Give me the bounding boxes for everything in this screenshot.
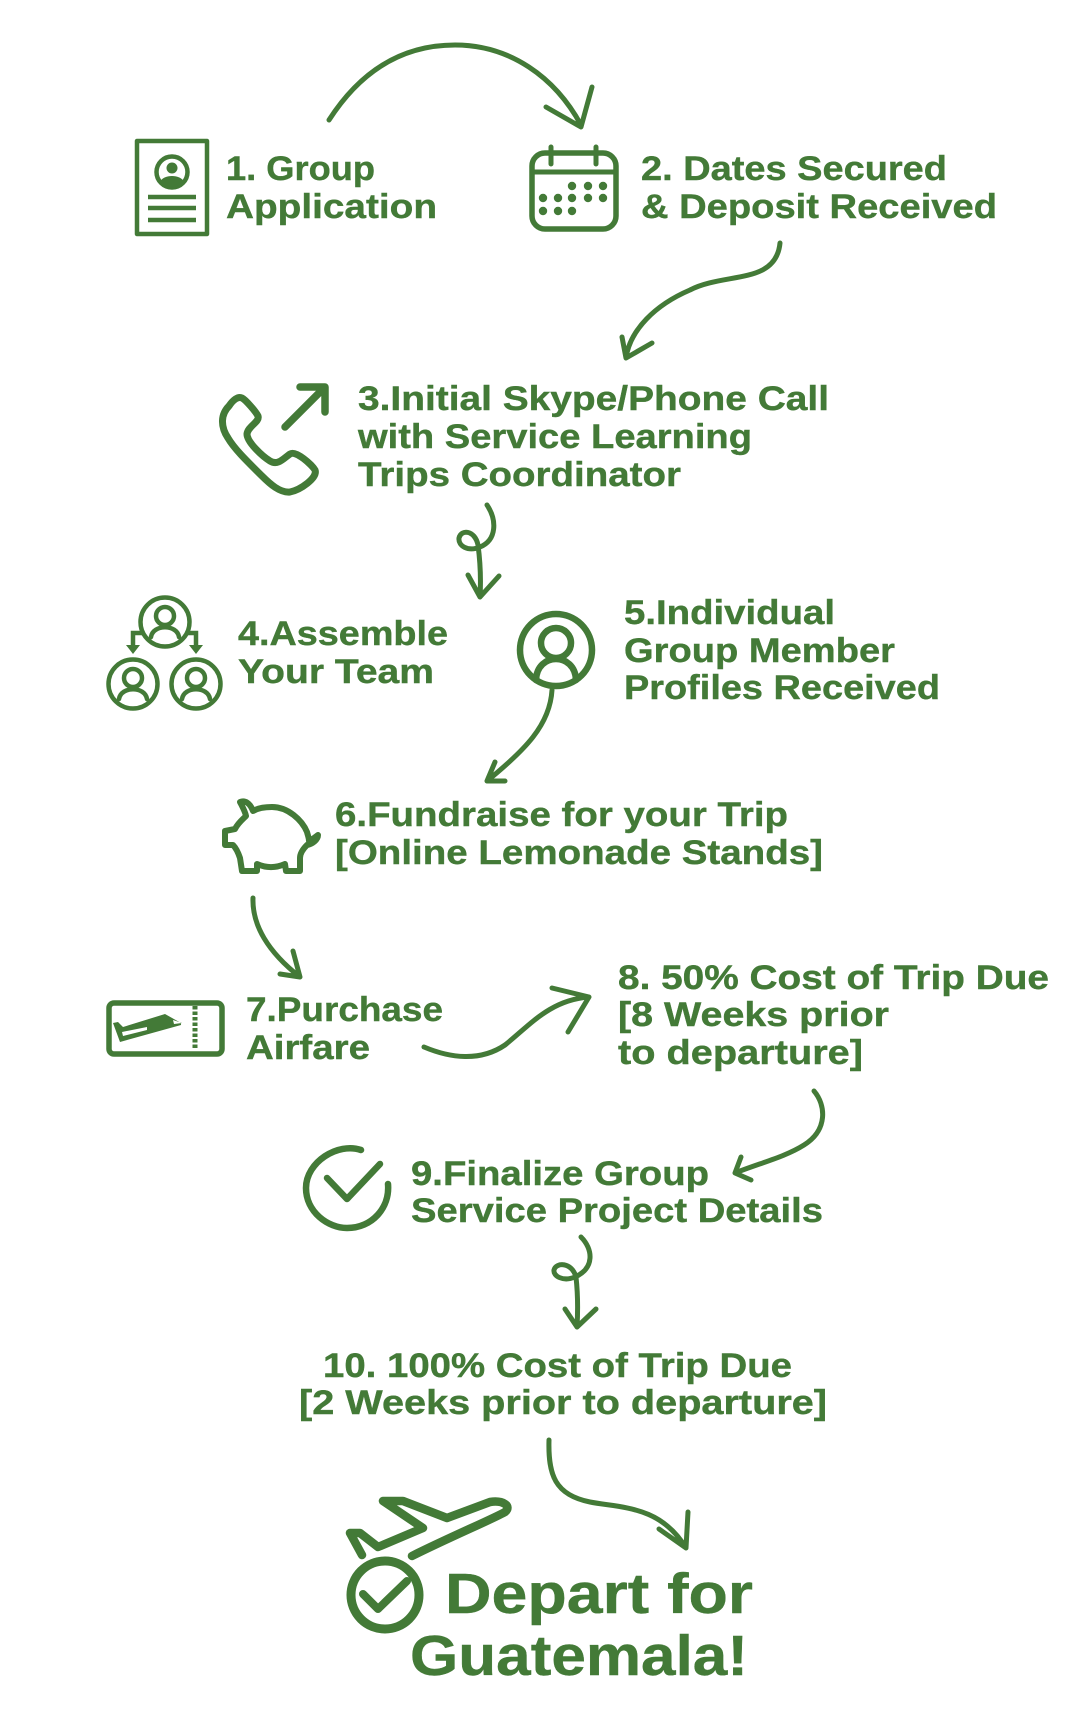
text: step 4: 4.Assemble	[238, 615, 448, 653]
arrow: step 8 to step 9	[735, 1091, 823, 1180]
text: step 9	[411, 1155, 823, 1230]
final step: depart for Guatemala	[350, 1501, 753, 1688]
text: step 1: Application	[226, 188, 437, 226]
text: step 9: 9.Finalize Group	[411, 1155, 709, 1193]
step 9: finalize project details	[306, 1148, 823, 1230]
text: step 10: 10. 100% Cost of Trip Due	[323, 1347, 792, 1385]
text: step 10: [2 Weeks prior to departure]	[299, 1384, 827, 1422]
step 8: 50% cost due	[618, 959, 1049, 1072]
text: step 8: 8. 50% Cost of Trip Due	[618, 959, 1049, 997]
step 3: skype or phone call	[222, 380, 829, 494]
text: step 2	[641, 150, 997, 226]
arrow: looped, step 9 to step 10	[554, 1237, 596, 1327]
text: step 8: to departure]	[618, 1034, 863, 1072]
arrow: step 1 to step 2	[329, 45, 592, 127]
text: step 3: Trips Coordinator	[358, 456, 681, 494]
step 4: assemble team	[108, 598, 448, 708]
text: step 10	[299, 1347, 827, 1422]
icon: calendar	[532, 147, 616, 229]
icon: phone with outgoing arrow	[222, 387, 325, 492]
text: step 3: 3.Initial Skype/Phone Call	[358, 380, 829, 418]
text: step 3: with Service Learning	[357, 418, 752, 456]
text: step 9: Service Project Details	[411, 1192, 823, 1230]
step 6: fundraise	[225, 796, 823, 872]
arrow: step 10 to departure	[549, 1440, 688, 1548]
text: step 7	[246, 991, 443, 1067]
text: step 7: 7.Purchase	[246, 991, 443, 1029]
icon: airplane	[350, 1501, 507, 1556]
heading: depart for Guatemala: Depart for	[445, 1562, 753, 1626]
icon: check in circle	[351, 1561, 419, 1629]
arrow: step 7 to step 8	[424, 988, 589, 1057]
text: step 8: [8 Weeks prior	[618, 996, 889, 1034]
text: step 7: Airfare	[246, 1029, 370, 1067]
icon: team of three people	[108, 598, 220, 708]
step 1: group application	[137, 141, 437, 234]
text: step 1	[226, 150, 437, 226]
text: step 5: 5.Individual	[624, 594, 835, 632]
step 5: member profiles	[520, 594, 940, 707]
icon: person in circle	[520, 614, 592, 686]
icon: check in open circle	[306, 1148, 388, 1228]
step 7: purchase airfare	[109, 991, 443, 1067]
text: step 2: 2. Dates Secured	[641, 150, 947, 188]
text: step 1: 1. Group	[226, 150, 375, 188]
step 10: 100% cost due	[299, 1347, 827, 1422]
text: step 5	[624, 594, 940, 707]
text: step 6	[335, 796, 823, 872]
heading: depart for Guatemala	[410, 1562, 753, 1688]
icon: piggy bank	[225, 801, 318, 871]
arrow: step 5 to step 6	[487, 690, 552, 781]
icon: airline ticket	[109, 1003, 222, 1054]
text: step 5: Group Member	[624, 632, 895, 670]
text: step 2: & Deposit Received	[641, 188, 997, 226]
arrow: step 6 to step 7	[253, 898, 300, 977]
text: step 8	[618, 959, 1049, 1072]
text: step 6: [Online Lemonade Stands]	[335, 834, 823, 872]
text: step 3	[357, 380, 829, 494]
arrow: step 2 to step 3	[622, 243, 780, 358]
text: step 6: 6.Fundraise for your Trip	[335, 796, 788, 834]
arrow: looped, step 3 to step 4	[459, 505, 499, 597]
step 2: dates secured	[532, 147, 997, 229]
icon: application document	[137, 141, 207, 234]
heading: depart for Guatemala: Guatemala!	[410, 1624, 748, 1688]
text: step 4: Your Team	[238, 653, 434, 691]
text: step 5: Profiles Received	[624, 669, 940, 707]
text: step 4	[238, 615, 448, 691]
